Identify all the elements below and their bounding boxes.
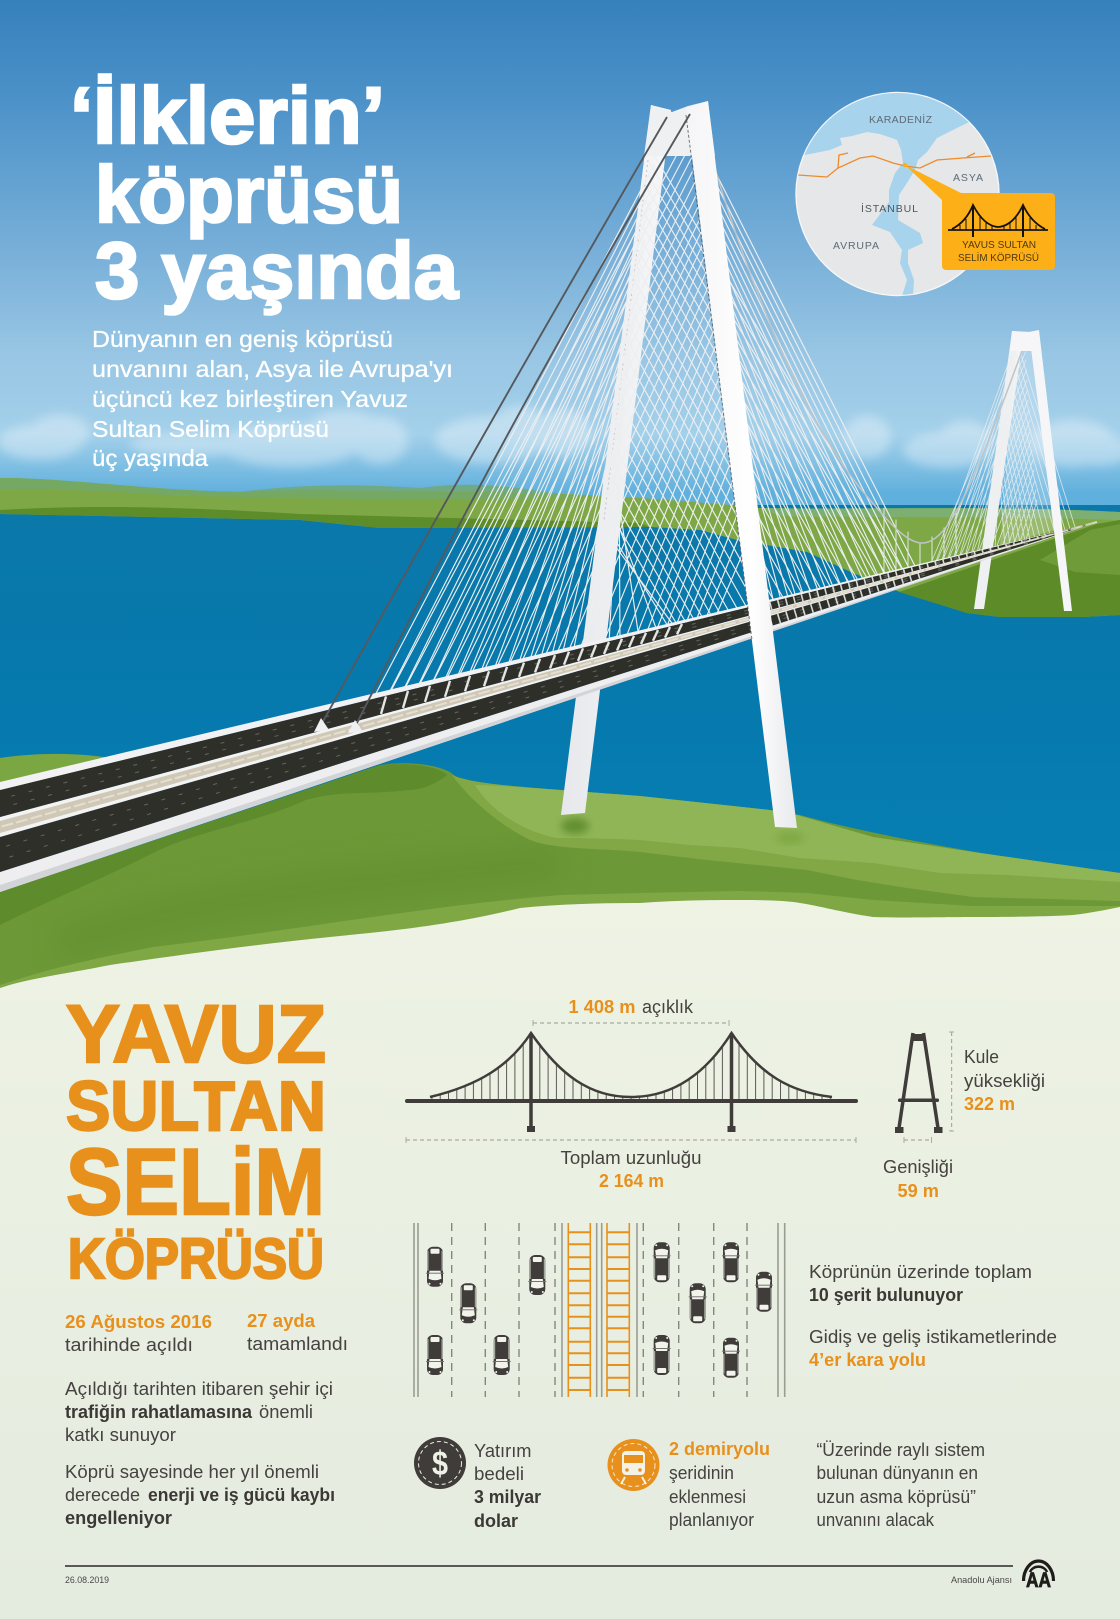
footer: 26.08.2019 [65,1575,109,1585]
map callout pointer [903,163,963,200]
title [70,71,458,315]
traffic text: Açıldığı tarihten itibaren şehir içi [65,1378,333,1399]
subtitle text: Sultan Selim Köprüsü [92,416,329,442]
heading: bridge name: SELiM [66,1129,325,1234]
investment text [474,1440,541,1531]
traffic text: trafiğin rahatlamasına [65,1401,253,1422]
hangers under main span [884,508,956,579]
left shore [0,754,130,800]
construction time: tamamlandı [247,1333,348,1354]
lanes text: 10 şerit bulunuyor [809,1284,963,1305]
cars [426,1242,773,1378]
subtitle text [92,326,453,471]
construction time: 27 ayda [247,1310,316,1331]
map callout box [942,193,1055,270]
subtitle text: üç yaşında [92,445,209,471]
railway text: şeridinin [669,1462,734,1483]
main cable right span [700,115,1026,543]
tower height label: 322 m [964,1093,1015,1114]
water: Bosphorus [0,505,1120,890]
total length dimension: 2 164 m [599,1170,664,1191]
energy text: Köprü sayesinde her yıl önemli [65,1461,319,1482]
footer: Anadolu Ajansı [951,1575,1012,1586]
quote text: uzun asma köprüsü” [816,1486,976,1507]
map: sea and strait [798,93,991,295]
subtitle text: unvanını alan, Asya ile Avrupa'yı [92,356,453,382]
clouds [0,405,1120,468]
callout label [958,239,1039,264]
energy text: enerji ve iş gücü kaybı [148,1484,335,1505]
railway text [669,1438,770,1530]
quote text: “Üzerinde raylı sistem [816,1439,985,1460]
total length dimension: Toplam uzunluğu [560,1147,702,1168]
lanes text [809,1261,1057,1370]
tower height label [949,1032,1045,1131]
dark backstay cables [321,114,690,727]
subtitle text: üçüncü kez birleştiren Yavuz [92,386,408,412]
title: ‘İlklerin’ [70,71,385,160]
callout label: YAVUS SULTAN [962,239,1036,251]
quote text: bulunan dünyanın en [816,1462,978,1483]
map: sea and strait: ASYA [953,172,983,184]
investment text: bedeli [474,1463,524,1484]
Anadolu Agency logo [1024,1561,1054,1592]
total length dimension [406,1137,856,1191]
sky background [0,0,1120,530]
cable anchors [314,718,363,733]
tower width label [883,1137,953,1201]
far tower opening haze [1000,351,1056,545]
map: sea and strait: AVRUPA [833,240,879,252]
energy text [65,1461,335,1528]
railway text: planlanıyor [669,1509,754,1530]
right fan from back leg [603,150,905,636]
footer [65,1566,1013,1586]
road plan diagram [414,1223,785,1397]
investment text: dolar [474,1510,518,1531]
bridge deck [0,522,1097,892]
railway text: eklenmesi [669,1486,746,1507]
left fan from front leg [378,130,742,715]
cream lower panel [0,900,1120,1619]
locator map [790,85,1055,296]
heading: bridge name [66,989,326,1291]
energy text: derecede [65,1484,140,1505]
right fan from front leg [694,130,917,612]
callout label: SELİM KÖPRÜSÜ [958,251,1039,264]
tower height label: Kule [964,1046,999,1067]
bridge elevation diagram [407,1033,856,1132]
rail tracks [568,1223,629,1397]
far tower back leg [974,331,1024,609]
subtitle text: Dünyanın en geniş köprüsü [92,326,393,352]
suspension cables [362,115,1075,720]
tower diagram [895,1033,942,1133]
tower width label: 59 m [898,1180,939,1201]
main tower top beam [644,101,715,156]
title: 3 yaşında [95,226,458,315]
lane lines [414,1223,785,1397]
investment text: Yatırım [474,1440,532,1461]
title: köprüsü [95,150,403,239]
quote text: unvanını alacak [816,1509,935,1530]
far hills and right shore [0,478,1120,617]
traffic text [65,1378,333,1445]
investment text: 3 milyar [474,1486,541,1507]
main tower back leg [561,105,671,815]
energy text: engelleniyor [65,1507,172,1528]
lanes text: Köprünün üzerinde toplam [809,1261,1032,1282]
opening date [65,1311,212,1355]
far tower front leg and beam [1010,330,1072,611]
left fan from back leg [362,165,680,720]
span dimension: 1 408 m [568,996,636,1017]
traffic text: önemli [259,1401,313,1422]
icon: train [608,1439,660,1491]
main tower front leg [686,101,797,828]
front leg dark edge [686,115,752,640]
icon: dollar [414,1437,466,1489]
traffic text: katkı sunuyor [65,1424,176,1445]
span dimension [533,996,729,1026]
span dimension: açıklık [642,996,694,1017]
opening date: tarihinde açıldı [65,1334,193,1355]
heading: bridge name: YAVUZ [66,989,326,1080]
map: sea and strait: İSTANBUL [861,202,918,215]
foreground green bank [0,763,1120,1010]
map: sea and strait: KARADENİZ [869,113,933,126]
opening date: 26 Ağustos 2016 [65,1311,212,1332]
lanes text: 4’er kara yolu [809,1349,926,1370]
construction time [247,1310,348,1354]
lanes text: Gidiş ve geliş istikametlerinde [809,1326,1057,1347]
road cross ties right span [770,534,1050,606]
road cross ties left span [381,624,682,714]
Anadolu Agency logo: AA [1026,1569,1051,1592]
tower width label: Genişliği [883,1156,953,1177]
railway text: 2 demiryolu [669,1438,770,1459]
heading: bridge name: KÖPRÜSÜ [68,1227,324,1291]
heading: bridge name: SULTAN [66,1067,326,1145]
callout bridge icon [948,205,1048,237]
tower height label: yüksekliği [964,1070,1045,1091]
icon: dollar: $ [432,1445,448,1483]
far tower cables [930,345,1075,565]
quote text [816,1439,985,1530]
